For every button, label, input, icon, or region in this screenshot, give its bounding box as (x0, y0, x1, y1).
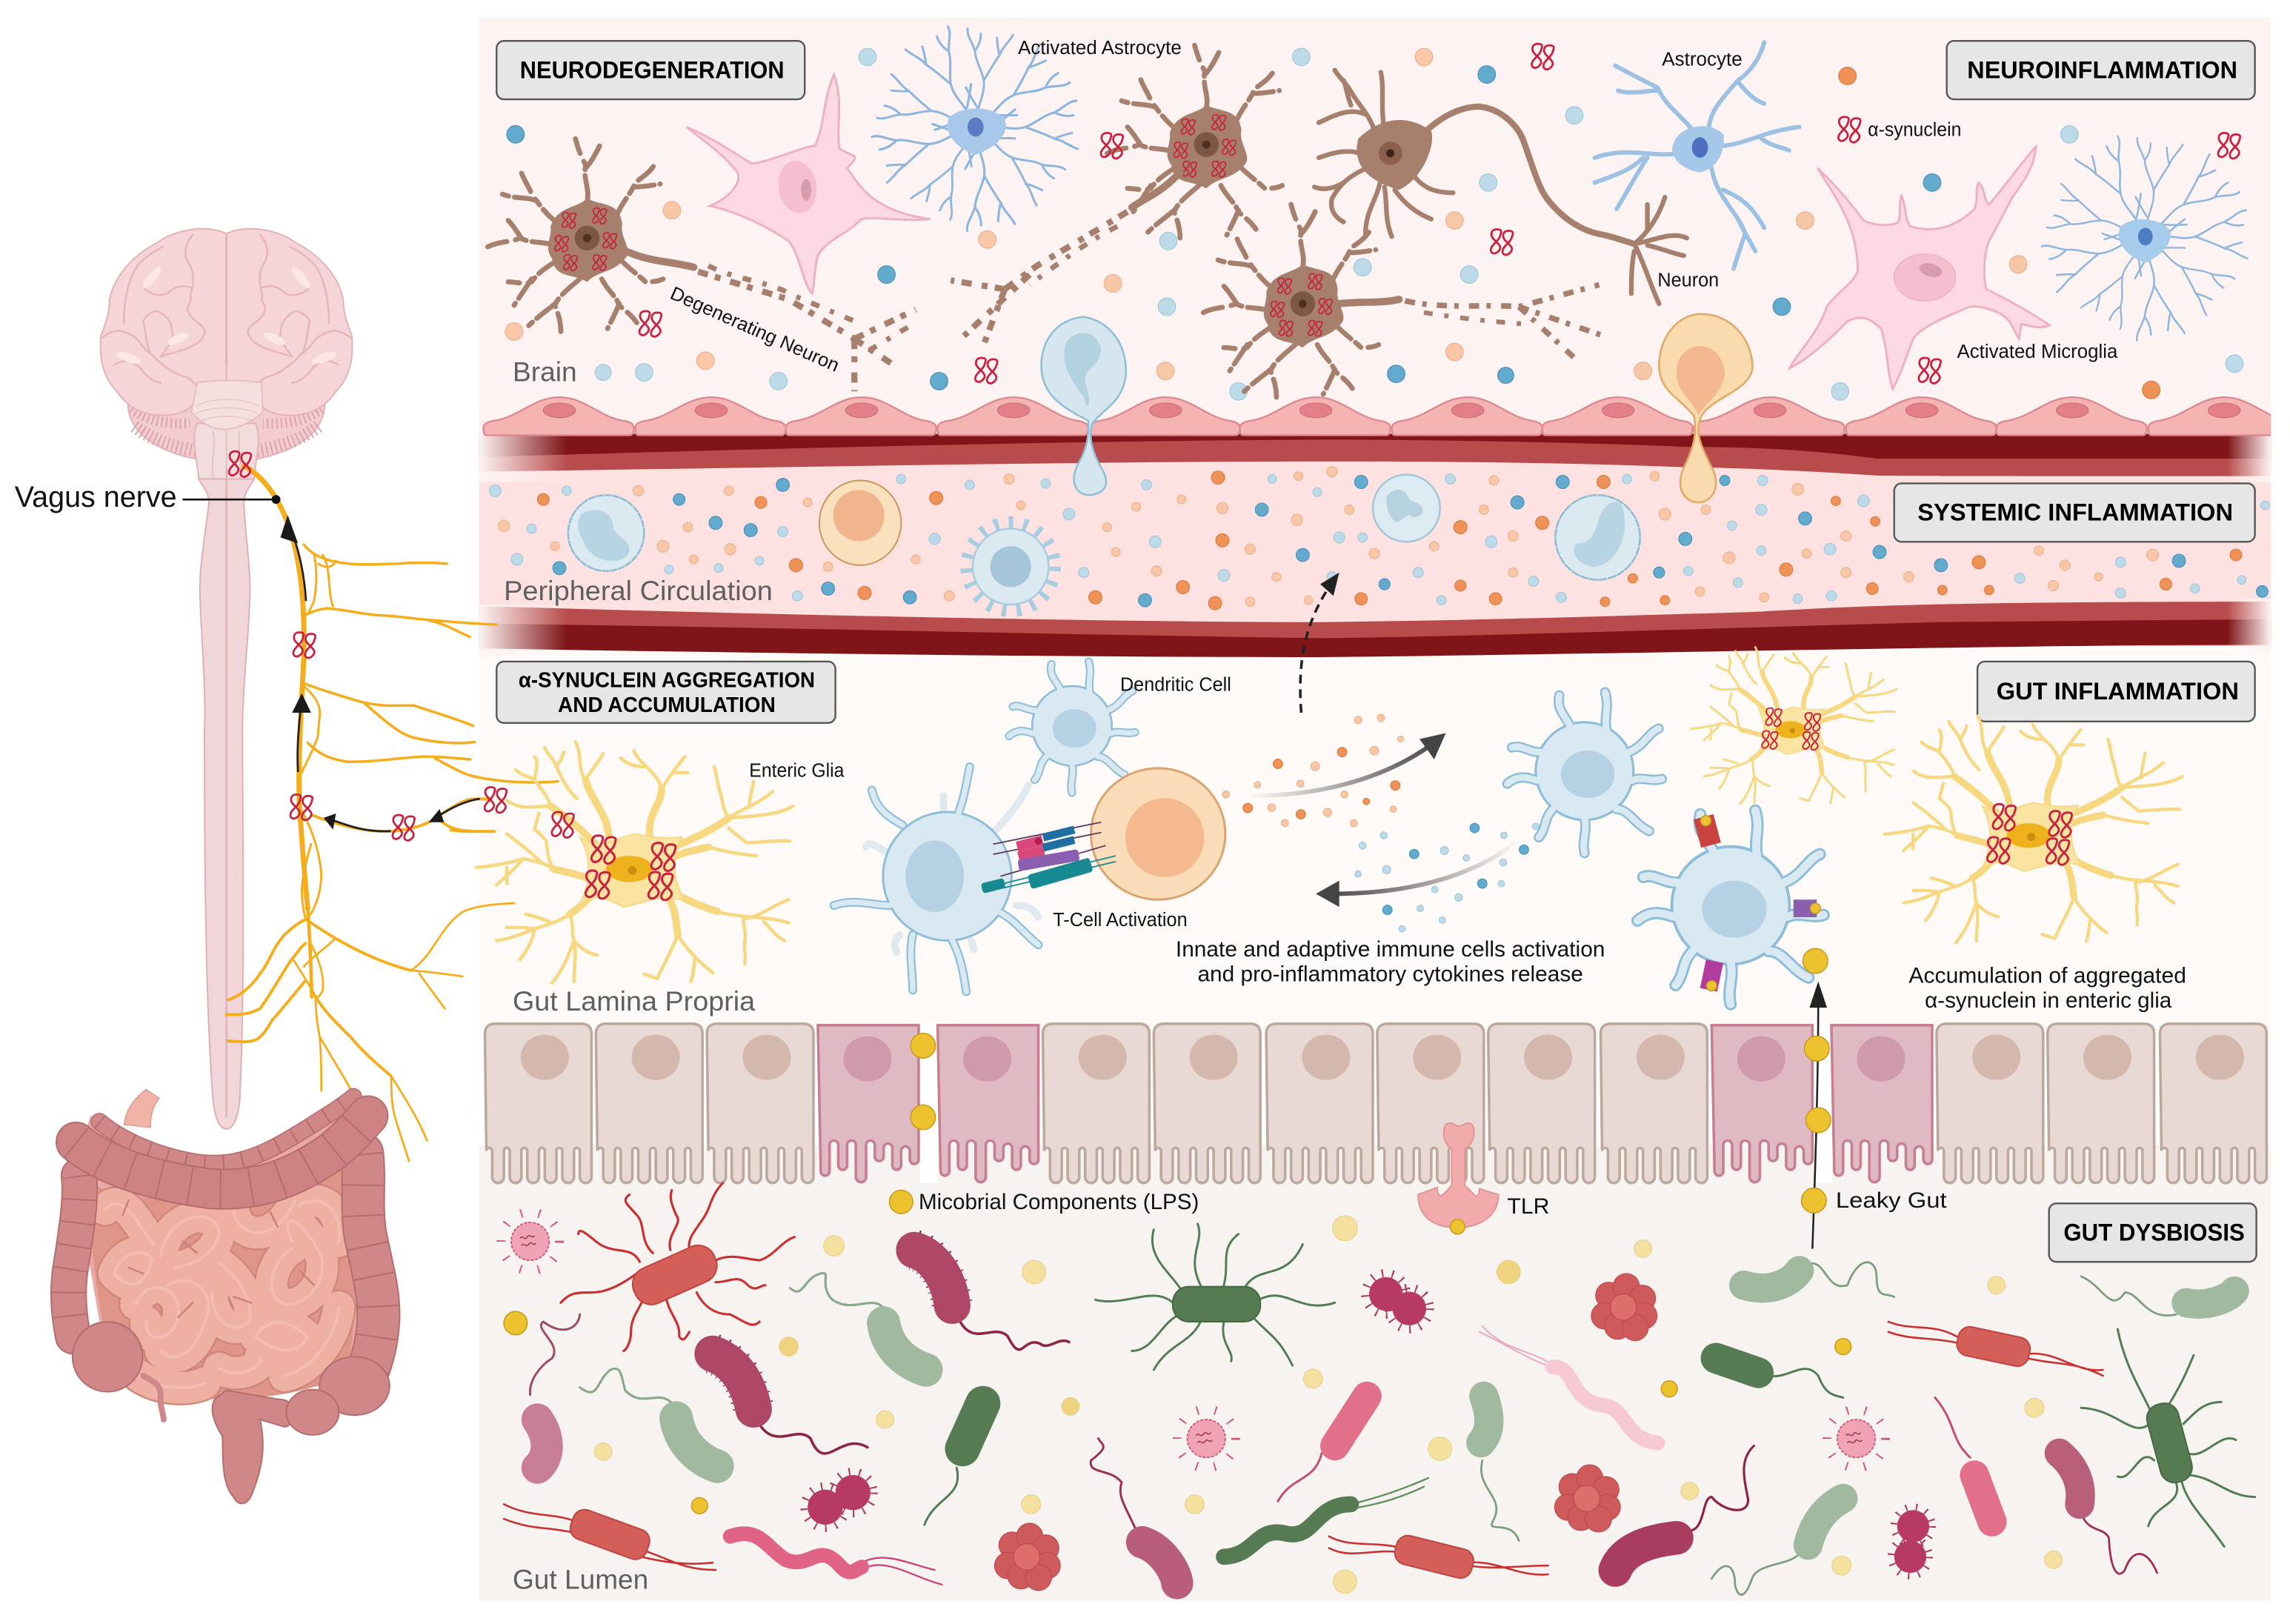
leaky gut arrow and LPS (1802, 948, 1831, 1248)
healthy neuron (1314, 70, 1687, 304)
cytokine particles in brain (505, 48, 2243, 400)
T cell in blood (819, 481, 901, 565)
title: alpha-synuclein aggregation: α-SYNUCLEIN AGGREGATION (519, 668, 815, 692)
monocyte right (1555, 495, 1640, 580)
text: accumulation in enteric glia: α-synuclein in enteric glia (1925, 988, 2172, 1013)
degenerating neuron 3 (1203, 204, 1603, 397)
bacterium: pale pink spiral (1479, 1326, 1657, 1443)
label: gut lamina propria: Gut Lamina Propria (513, 985, 755, 1016)
T-cell activation receptors (981, 822, 1116, 893)
bacterium: maroon bottom right (1615, 1446, 1754, 1570)
orange cytokines (1222, 714, 1403, 827)
label: dendritic cell: Dendritic Cell (1120, 674, 1231, 695)
endothelial cell layer (484, 397, 2290, 435)
title: alpha-synuclein aggregation: AND ACCUMULATION (558, 693, 776, 717)
text: accumulation in enteric glia (1908, 964, 2186, 1013)
degenerating neuron 1 (487, 139, 916, 391)
astrocyte right (2040, 135, 2248, 342)
microbial component particles (504, 1216, 2062, 1594)
bacterium: light green bottom (1711, 1498, 1843, 1595)
viruses (501, 1212, 1885, 1468)
curved arrow: cytokines release left (1316, 839, 1519, 907)
title: neuroinflammation (1947, 41, 2255, 99)
vagus nerve label and leader line: Vagus nerve (15, 481, 177, 513)
title: gut dysbiosis (2049, 1203, 2257, 1262)
label: alpha-synuclein: α-synuclein (1868, 119, 1961, 140)
title: gut inflammation (1977, 662, 2255, 722)
epithelial barrier (485, 1022, 2266, 1183)
bacteria: red cluster upper (1591, 1274, 1657, 1341)
text: immune cell activation (1176, 937, 1605, 987)
activated astrocyte (871, 25, 1078, 233)
blood vessel upper wall (479, 433, 2271, 482)
blood vessel lower wall (479, 599, 2271, 657)
dendritic cell top (1009, 662, 1135, 793)
panel: gut lumen background (479, 1145, 2271, 1600)
bacterium: light green top right (1744, 1262, 1894, 1297)
bacterium: dark green flagellated rod (1095, 1224, 1335, 1370)
bacterium: red rod bottom (1329, 1533, 1548, 1580)
vagus nerve fibres (227, 466, 558, 1161)
antigen presenting cell (834, 767, 1039, 991)
alpha-synuclein aggregates in brain (639, 44, 2240, 383)
text: immune cell activation: Innate and adaptive immune cells activation (1176, 937, 1605, 962)
title: neuroinflammation: NEUROINFLAMMATION (1967, 56, 2237, 83)
bacterium: dark green rod (925, 1403, 983, 1525)
label: astrocyte: Astrocyte (1662, 50, 1743, 70)
bacterium: pink rod lower right (1935, 1397, 1992, 1522)
text: immune cell activation: and pro-inflammatory cytokines release (1197, 962, 1583, 987)
title: alpha-synuclein aggregation (496, 662, 836, 723)
bacteria: red cluster lower (1554, 1465, 1620, 1532)
bacterium: mauve curved (530, 1314, 580, 1468)
panel: peripheral circulation background (479, 453, 2271, 635)
bacteria: cocci pair (805, 1472, 873, 1528)
blood particles (489, 467, 2269, 610)
degenerating neuron 2 (951, 45, 1282, 350)
title: gut dysbiosis: GUT DYSBIOSIS (2063, 1219, 2245, 1246)
label: degenerating neuron: Degenerating Neuron (667, 283, 842, 376)
bacterium: pink rod (1278, 1396, 1367, 1501)
T cell (1091, 768, 1225, 899)
bacterium: green wavy (1224, 1478, 1428, 1557)
bacteria: cocci pair upper (1365, 1274, 1430, 1329)
legend: microbial components: Micobrial Components (LPS) (919, 1190, 1199, 1214)
migrating immune cell (1042, 317, 1126, 495)
enteric glia left with aggregates (476, 742, 793, 983)
bacterium: mauve curved bottom (1091, 1439, 1177, 1583)
bacterium: dark green rod right (1716, 1358, 1843, 1397)
left: intestine (69, 1090, 390, 1503)
label: activated astrocyte: Activated Astrocyte (1018, 38, 1182, 59)
panel: brain background (479, 18, 2271, 456)
bacterium: maroon curved top (914, 1250, 1069, 1350)
enteric glia top (1691, 648, 1897, 804)
bacterium: dark green flagellated far right (2081, 1329, 2255, 1547)
spiky dendritic cell in blood (967, 523, 1054, 610)
leaked LPS left gap (911, 1034, 936, 1130)
label: gut lumen: Gut Lumen (513, 1564, 648, 1595)
bacterium: maroon curved middle (713, 1354, 868, 1454)
bacteria: cocci vertical pair (1891, 1507, 1932, 1576)
title: neurodegeneration (496, 41, 805, 99)
label: TLR: TLR (1507, 1194, 1550, 1219)
left: spinal cord (199, 467, 254, 1129)
blue cytokines (1355, 823, 1539, 932)
panel: gut lamina propria background (479, 650, 2271, 1037)
bacteria: red cluster (994, 1523, 1060, 1591)
title: neurodegeneration: NEURODEGENERATION (520, 56, 785, 83)
bacterium: light green far right (2081, 1277, 2234, 1316)
title: systemic inflammation (1894, 483, 2255, 542)
neutrophil (1373, 475, 1440, 542)
dendritic cell right (1508, 692, 1662, 853)
left: brain (101, 229, 353, 479)
label: enteric glia: Enteric Glia (749, 761, 845, 782)
text: accumulation in enteric glia: Accumulation of aggregated (1908, 964, 2186, 988)
nerve direction arrows (281, 515, 444, 830)
bacterium: red rod right (1888, 1322, 2103, 1376)
label: T-cell activation: T-Cell Activation (1053, 910, 1188, 931)
bacterium: pale green curved lower (580, 1368, 717, 1466)
label: brain: Brain (513, 356, 577, 387)
bacterium: red rod lower (504, 1504, 716, 1570)
title: systemic inflammation: SYSTEMIC INFLAMMATION (1917, 499, 2233, 526)
bacterium: red flagellated rod (561, 1183, 794, 1351)
enteric glia right (1885, 716, 2183, 942)
bacterium: light green curved (1481, 1396, 1519, 1541)
activated microglia left (687, 75, 931, 293)
monocyte (568, 495, 644, 571)
curved arrow: cytokines release right (1248, 733, 1446, 796)
dashed arrow to circulation (1300, 573, 1339, 713)
bacterium: maroon lower right (2059, 1453, 2157, 1574)
activated microglia right (1790, 147, 2050, 389)
alpha-synuclein along vagus nerve (229, 451, 507, 840)
label: neuron: Neuron (1657, 270, 1719, 290)
bacterium: pink wavy (730, 1534, 942, 1585)
vagus nerve label and leader line (15, 481, 281, 513)
astrocyte (1595, 42, 1800, 269)
migrating T cell (1659, 314, 1753, 502)
dendritic cell with pattern receptors (1637, 811, 1824, 1004)
label: peripheral circulation: Peripheral Circulation (504, 575, 773, 606)
white margin right of panels (2271, 0, 2290, 1624)
title: gut inflammation: GUT INFLAMMATION (1997, 678, 2239, 705)
label: activated microglia: Activated Microglia (1957, 342, 2118, 362)
bacterium: pale green curved top (790, 1273, 926, 1370)
label: leaky gut: Leaky Gut (1836, 1188, 1947, 1213)
toll-like receptor (1418, 1123, 1499, 1234)
